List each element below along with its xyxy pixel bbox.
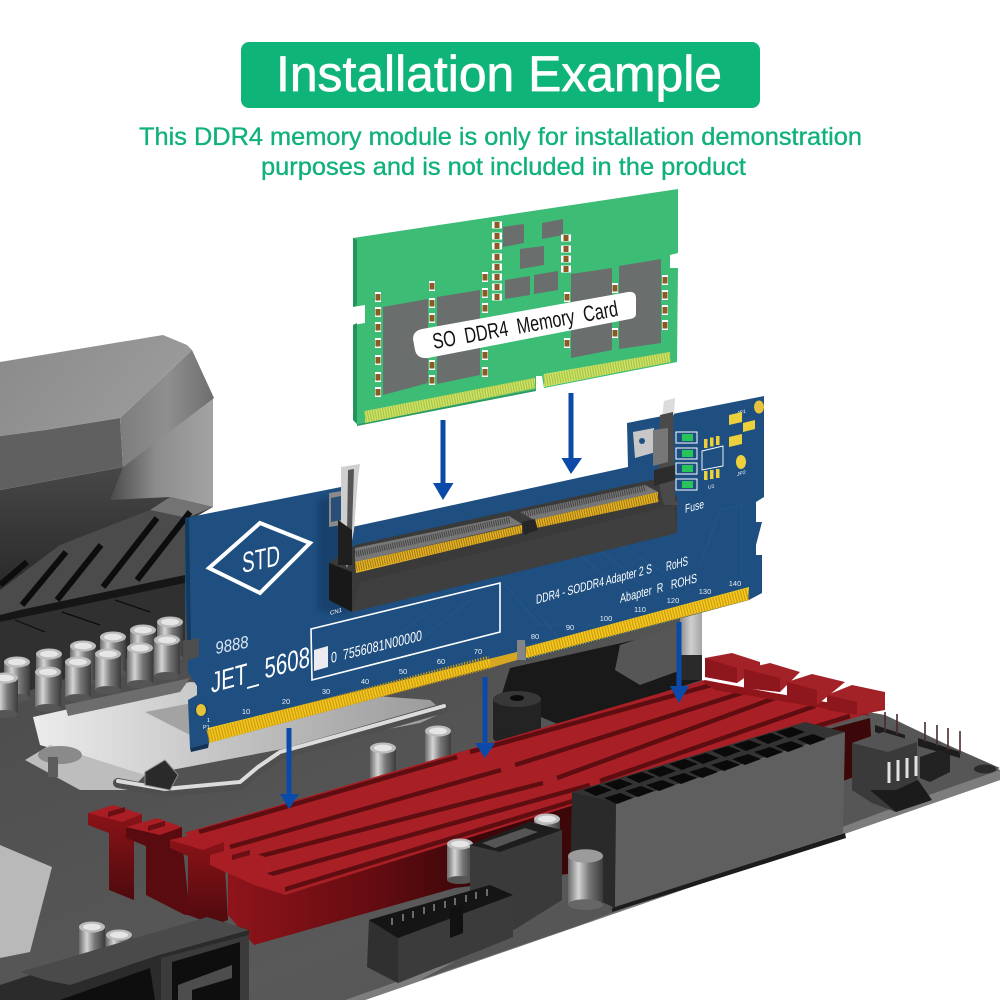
contact pin numbers: 120 (667, 596, 679, 605)
contact pin numbers: 30 (322, 687, 330, 696)
trace outlines (380, 505, 742, 650)
board silk text: 1 (207, 718, 210, 724)
contact pin numbers: 60 (437, 657, 445, 666)
arrow: memory card right into socket (562, 393, 582, 474)
contact pin numbers: 50 (399, 667, 407, 676)
board silk text: P1 (203, 725, 210, 731)
board silk text: JP2 (737, 470, 746, 478)
left latch tabs (88, 805, 285, 925)
capacitor cluster (0, 616, 183, 718)
red memory slots (88, 653, 885, 945)
board silk text: 9888 (214, 632, 250, 658)
board silk text: JET_ 5608 (211, 641, 310, 700)
left socket latch (329, 464, 360, 568)
board silk text: U1 (708, 483, 715, 491)
subtitle note: This DDR4 memory module is only for installation demonstration (139, 123, 862, 151)
capacitors near ATX connector (447, 814, 603, 910)
socket contact pins (355, 485, 658, 573)
gold fingers (365, 352, 670, 423)
memory card module (353, 189, 678, 426)
SMD resistors (375, 222, 668, 397)
right socket latch (633, 398, 680, 505)
arrow: adapter left into slot (280, 728, 299, 809)
CPU cooler heatsink (0, 335, 214, 640)
contact pin numbers: 140 (729, 579, 741, 588)
contact pin numbers: 40 (361, 677, 369, 686)
contact pin numbers: 10 (242, 707, 250, 716)
board shadow around socket (318, 495, 350, 615)
subtitle note (139, 123, 862, 181)
board silk text: 0 7556081N00000 (331, 627, 422, 667)
socket lever (118, 706, 444, 792)
mounting holes (194, 400, 764, 716)
contact pin numbers: 80 (531, 632, 539, 641)
contact pin numbers: 20 (282, 697, 290, 706)
heatsink fins (0, 510, 190, 628)
right pin headers (875, 712, 960, 758)
slot front face (228, 718, 873, 945)
contact pin numbers: 100 (600, 614, 612, 623)
rear components under adapter (500, 612, 702, 725)
board silk text: 145 146 (503, 563, 525, 576)
contact pin numbers (242, 579, 741, 716)
CPU socket retention plate (25, 678, 444, 792)
contact pin numbers: 90 (566, 623, 574, 632)
IDC pin header (367, 885, 513, 983)
SATA vertical connector (470, 822, 562, 930)
standoff post (493, 691, 541, 745)
board silk text: JP1 (737, 409, 746, 417)
DIMM socket body (329, 478, 677, 612)
memory chips (383, 219, 661, 395)
arrow: adapter centre into slot (475, 677, 495, 758)
adapter PCB (185, 396, 764, 748)
socket screw (38, 746, 82, 777)
board silk text: RoHS (666, 553, 688, 574)
subtitle note: purposes and is not included in the product (261, 153, 746, 181)
memory card label: SO DDR4 Memory Card (430, 296, 620, 354)
jumper pads and U1 chip (702, 412, 755, 480)
contact pin numbers: 130 (699, 587, 711, 596)
bottom-left capacitors (79, 922, 132, 975)
memory card label (413, 292, 636, 358)
board silk text: CN1 (330, 607, 343, 617)
connector pin holes (583, 727, 826, 804)
STD diamond logo: STD (242, 539, 280, 580)
light grey chipset block (0, 845, 52, 958)
STD diamond logo (209, 523, 310, 593)
contact pin numbers: 70 (474, 647, 482, 656)
gold edge connector right (517, 587, 749, 660)
fan connector (852, 732, 996, 812)
board silk text: Abapter R ROHS (620, 570, 697, 606)
board silk text: DDR4 - SODDR4 Adapter 2 S (536, 561, 652, 607)
slot rail tops (184, 680, 873, 895)
SATA connector block (0, 917, 249, 1000)
board silk text (203, 409, 746, 731)
board capacitors (370, 726, 451, 788)
24-pin ATX power connector (570, 722, 846, 912)
title badge: Installation Example (276, 46, 722, 102)
board silk text: 259 (641, 531, 652, 541)
motherboard base (0, 590, 1000, 1000)
gold edge connector left (208, 652, 517, 743)
board silk text: Fuse (685, 497, 704, 516)
arrow: adapter right into slot (670, 622, 689, 703)
contact pin numbers: 110 (634, 605, 646, 614)
arrow: memory card left into socket (433, 420, 454, 500)
adapter board (185, 396, 764, 752)
VRM chokes row (0, 583, 185, 700)
right latch tabs (705, 653, 885, 715)
PCB (353, 189, 678, 424)
indicator LEDs (676, 432, 697, 490)
